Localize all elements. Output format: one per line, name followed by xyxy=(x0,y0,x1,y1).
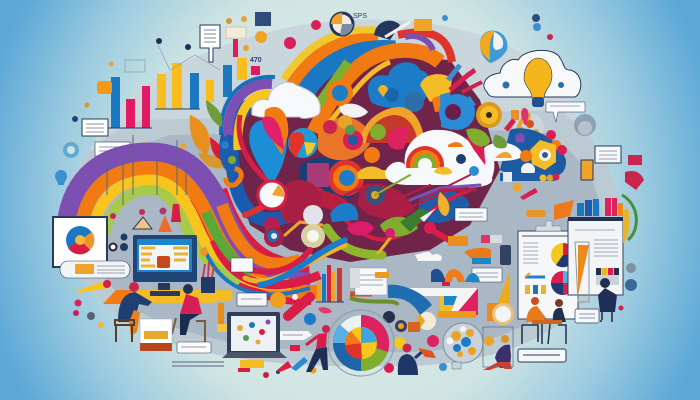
cloud xyxy=(484,50,581,97)
monitor xyxy=(133,235,197,290)
gold gauge xyxy=(483,270,514,367)
laptop xyxy=(222,293,312,378)
icon: bulb left xyxy=(55,170,67,185)
person right xyxy=(180,294,202,314)
center colour patches xyxy=(298,117,470,223)
label: SPS: SPS xyxy=(353,13,367,20)
white cloud left xyxy=(252,82,320,118)
orange tag xyxy=(97,81,112,94)
document xyxy=(355,268,387,295)
rainbow arch left xyxy=(66,135,320,295)
grey backdrop outer xyxy=(62,110,620,366)
notes left xyxy=(55,119,186,185)
globe balloon xyxy=(288,128,318,158)
panel: right mid xyxy=(506,108,644,192)
callout xyxy=(60,261,130,278)
small note xyxy=(226,27,246,38)
clipboard xyxy=(518,221,578,319)
callout xyxy=(237,293,267,306)
white cloud with rainbow xyxy=(385,130,494,187)
desk with people xyxy=(103,262,233,366)
dome xyxy=(323,107,425,163)
center ribbons top xyxy=(221,31,452,220)
pie chart wheel xyxy=(328,310,394,376)
people at table xyxy=(522,297,566,344)
person kneeling xyxy=(483,335,566,370)
label: 470: 470 xyxy=(250,57,262,64)
small icons cluster xyxy=(73,204,208,328)
icon: light bulb xyxy=(524,58,552,98)
document right xyxy=(568,195,637,323)
person standing xyxy=(600,278,610,288)
person running xyxy=(306,325,330,372)
panel: bar charts top left xyxy=(72,12,296,128)
bar chart center xyxy=(316,265,389,302)
leaves xyxy=(190,100,241,185)
pill and balls xyxy=(270,292,439,374)
gears xyxy=(439,65,502,130)
notes mid right xyxy=(231,200,574,286)
bars on top xyxy=(577,203,584,216)
bubble bowl xyxy=(439,323,494,371)
icon: pie badge xyxy=(311,13,448,40)
tangled center ribbons xyxy=(240,175,480,285)
machinery cluster xyxy=(466,128,567,200)
orange and blue stripes xyxy=(350,269,480,318)
rainbow half xyxy=(307,160,403,205)
blue cloud xyxy=(327,62,452,118)
petals xyxy=(249,107,288,185)
grey backdrop upper xyxy=(90,20,590,190)
note xyxy=(177,342,211,353)
center collage fill xyxy=(232,55,500,262)
person left xyxy=(118,292,152,322)
note top xyxy=(200,25,220,62)
frame with chart xyxy=(53,217,130,278)
grey backdrop inner xyxy=(85,130,601,352)
flyer xyxy=(140,319,172,345)
callout xyxy=(546,102,585,122)
person with flag xyxy=(398,344,436,375)
balloon and bulb cloud xyxy=(480,14,585,122)
